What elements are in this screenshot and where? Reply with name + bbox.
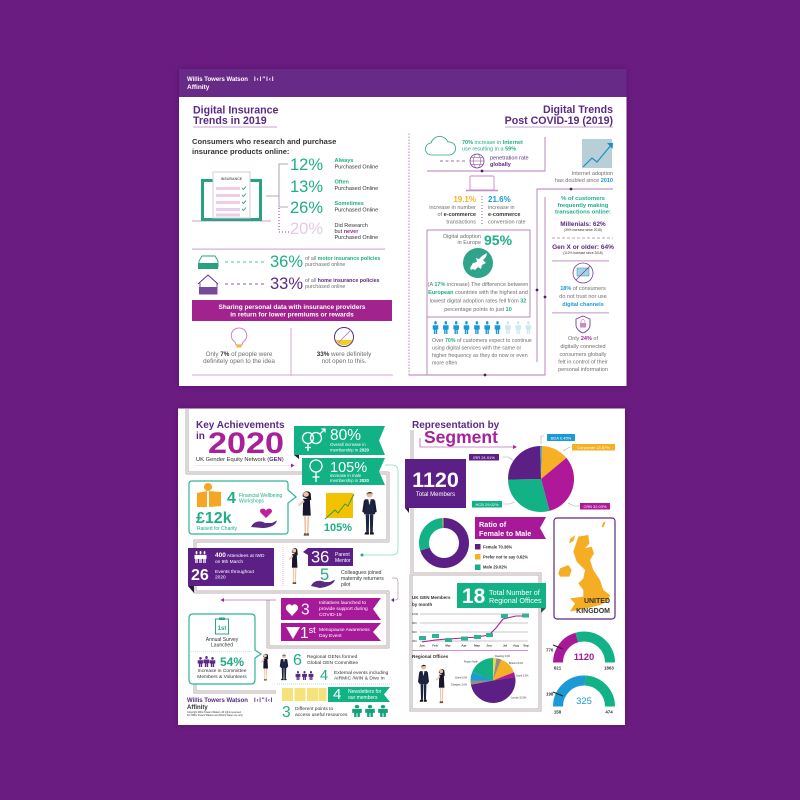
- header band: Willis Towers Watson: [187, 77, 248, 83]
- gauge: 1120 members: 1863: [604, 666, 614, 670]
- figure: man raising arm: [418, 665, 429, 702]
- callout: annual survey: [189, 614, 261, 684]
- legend: ratio: Prefer not to say 0.62%: [483, 554, 528, 560]
- stat: often 13%: [290, 178, 378, 196]
- stat: 3 different points: access useful resources: [295, 712, 348, 718]
- stat: sometimes 26%: Purchased Online: [334, 208, 378, 214]
- text: penetration rate: [490, 156, 529, 168]
- text: percentage of customers: transactions online:: [555, 210, 611, 216]
- banner: sharing personal data: [192, 300, 392, 321]
- line chart: members by month: Sep: [523, 644, 529, 648]
- stat: motor insurance 36%: [225, 253, 380, 271]
- text: 70% increase in internet: 70% increase in Internet: [462, 140, 523, 146]
- text: 18% of consumers: 18% of consumers: [560, 286, 606, 292]
- stat: sometimes 26%: [290, 199, 378, 217]
- ribbon: 105% membership: membership in 2020: [330, 478, 370, 483]
- stat: 19.1% e-commerce transactions: of e-commerce: [437, 212, 476, 218]
- pie labels: [469, 434, 615, 510]
- text: penetration rate: globally: [490, 162, 512, 168]
- stat: always 12%: 12%: [290, 156, 323, 174]
- text: 7% open to the idea: [203, 351, 275, 365]
- panel: digital adoption in europe: lowest digital adoption rates fell from 32: [430, 298, 526, 304]
- stat: often 13%: Purchased Online: [334, 186, 378, 192]
- panel: digital trends 2019: [179, 69, 626, 386]
- panel: attendees and events: on 9th March: [215, 559, 243, 565]
- stat: sometimes 26%: 26%: [290, 199, 323, 217]
- stat: 6 regional gens: 6: [293, 652, 302, 669]
- ribbon: newsletters: Newsletters for: [348, 689, 382, 695]
- logo: willis towers watson affinity: Copyright Willis Towers Watson. All rights reserved.: [187, 711, 242, 714]
- stat: motor insurance 36%: purchased online: [305, 262, 345, 268]
- text: 24% of consumers: felt in control of their: [558, 360, 608, 366]
- legend: ratio: Male 29.02%: [483, 564, 507, 570]
- panel: attendees and events: Events throughout: [215, 569, 255, 575]
- stat: 21.6% e-commerce conversion: [488, 195, 526, 226]
- stat: 5 colleagues maternity: [311, 566, 384, 588]
- callout: annual survey: Members & Volunteers: [197, 674, 247, 680]
- label: 36 parent mentor: Parent: [335, 552, 350, 558]
- connector: grey route lines: [187, 409, 540, 710]
- stat: 5 colleagues maternity: maternity returners: [341, 576, 384, 582]
- pie labels: Corporate 13.57%: [577, 445, 610, 450]
- line chart: members by month: Aug: [513, 644, 519, 648]
- callout: annual survey: 54%: [220, 655, 244, 669]
- icon: crossed out coin: [334, 328, 354, 346]
- pie chart: regional offices: [412, 654, 529, 700]
- text: percentage of customers: % of customers: [561, 196, 606, 202]
- stat: 3 different points: 3: [282, 704, 291, 721]
- line chart: members by month: 400: [412, 639, 417, 643]
- gauge: 1120 members: 1120: [574, 652, 594, 663]
- ribbon: newsletters: 4: [333, 686, 341, 703]
- icon: committee people: [198, 656, 215, 667]
- text: 18% of consumers: [559, 286, 607, 308]
- panel: digital adoption in europe: [427, 230, 530, 317]
- stat: 19.1% e-commerce transactions: transactions: [446, 220, 476, 226]
- ribbon: 80% membership: 80%: [330, 427, 361, 444]
- ribbon: menopause awareness: 1: [300, 625, 309, 642]
- gauge: 325: 198: [546, 692, 554, 696]
- stat: motor insurance 36%: 36%: [270, 253, 303, 271]
- icon: crossed laptop: [573, 263, 593, 283]
- ribbon: 105% membership: increase in male: [330, 473, 362, 478]
- text: over 70% of customers: higher frequency as they do now or even: [432, 353, 528, 359]
- icon: car: [198, 256, 218, 269]
- heading: representation by segment: Representation by: [412, 420, 500, 431]
- heading: digital insurance trends: [193, 104, 278, 128]
- stat: 5 colleagues maternity: pilot: [341, 582, 351, 588]
- bracket connector: [266, 164, 290, 232]
- stat: always 12%: Purchased Online: [334, 164, 378, 170]
- line chart: members by month: Jan: [419, 644, 425, 648]
- gauge: 1120 members: 776: [546, 648, 554, 652]
- text: over 70% of customers: Over 70% of customers expect to continue: [432, 338, 532, 344]
- label: 36 parent mentor: 36: [311, 548, 329, 566]
- callout: annual survey: Annual Survey: [206, 637, 239, 643]
- pie chart: regional offices: Regional Offices: [412, 654, 449, 659]
- icon: rising chart: [582, 139, 613, 168]
- text: 7% open to the idea: Only 7% of people were: [206, 351, 273, 358]
- banner: sharing personal data: in return for lower premiums or rewards: [230, 312, 354, 318]
- heading: key achievements in 2020: UK Gender Equity Network (GEN): [196, 457, 284, 463]
- logo: willis towers watson affinity: Affinity: [187, 705, 208, 711]
- stat: always 12%: Always: [334, 158, 353, 164]
- donut chart: female to male: [424, 523, 464, 563]
- figure: woman mentor: [289, 548, 298, 584]
- line chart: members by month: Apr: [461, 644, 467, 648]
- ribbon: initiatives covid: provide support during: [319, 606, 368, 612]
- text: percentage of customers: frequently making: [558, 203, 609, 209]
- heading: digital insurance trends: Trends in 2019: [193, 115, 267, 127]
- ribbon: ratio of female to male: Ratio of: [479, 520, 507, 529]
- label: 18 regional offices: [457, 583, 546, 613]
- gauge: 325: 158: [554, 710, 562, 714]
- pie chart: regional offices: Bristol 13.0%: [509, 662, 524, 665]
- logo: willis towers watson affinity: For Willis Towers Watson and Affinity Water use only.: [187, 714, 243, 717]
- panel: united kingdom map: UNITED: [584, 598, 610, 605]
- ribbon: 80% membership: membership in 2020: [330, 448, 370, 452]
- callout: financial wellbeing: [189, 481, 296, 534]
- callout: financial wellbeing: Raised for Charity: [197, 526, 238, 532]
- gauge: 325: [546, 680, 613, 714]
- legend: ratio: Female 70.36%: [483, 544, 512, 550]
- icon: europe map: [463, 248, 493, 278]
- panel: attendees and events: [188, 548, 274, 593]
- pie chart: regional offices: Region North: [464, 660, 479, 664]
- arrow: magenta to pie: [420, 438, 517, 449]
- stat: 5 colleagues maternity: Colleagues joined: [341, 570, 382, 576]
- logo: willis towers watson affinity: I‹I"I‹I: [254, 698, 273, 704]
- stat: home insurance 33%: [225, 275, 380, 293]
- stat: 6 regional gens: Regional GENs formed: [307, 654, 358, 660]
- heading: representation by segment: [412, 420, 500, 447]
- logo: willis towers watson affinity: Willis Towers Watson: [187, 698, 248, 704]
- panel: digital adoption in europe: in Europe: [457, 240, 481, 246]
- label: 18 regional offices: Regional Offices: [489, 596, 542, 605]
- icon: gender symbols: [302, 429, 325, 451]
- callout: financial wellbeing: £12k: [196, 510, 232, 527]
- ribbon: initiatives covid: COVID-19: [319, 612, 342, 618]
- stat: often 13%: 13%: [290, 178, 323, 196]
- panel: attendees and events: 2020: [215, 574, 226, 580]
- stat: never 20%: but never: [334, 229, 359, 235]
- stat: 6 regional gens: Global GEN Committee: [307, 660, 358, 666]
- stat: 4 external events: External events including: [334, 670, 389, 676]
- line chart: members by month: Jun: [486, 644, 492, 648]
- text: penetration rate: penetration rate: [490, 156, 529, 162]
- pie chart: segments: [524, 462, 558, 496]
- callout: financial wellbeing: Workshops: [239, 498, 264, 504]
- stat: 6 regional gens: [293, 652, 358, 669]
- ribbon: 80% membership: Overall increase in: [330, 442, 366, 447]
- stat: 21.6% e-commerce conversion: 21.6%: [488, 195, 511, 204]
- stat: 19.1% e-commerce transactions: [429, 195, 476, 226]
- heading: digital trends post covid: Post COVID-19 (2019): [505, 115, 613, 127]
- stat: millenials 62%: Millenials: 62%: [560, 221, 606, 228]
- ribbon: initiatives covid: 3: [301, 602, 310, 618]
- text: 24% of consumers: consumers globally: [559, 352, 607, 358]
- icon: clipboard: 1st: [218, 626, 226, 632]
- line chart: members by month: Jul: [503, 644, 507, 648]
- arrow: teal connector: [360, 465, 398, 556]
- panel: digital adoption in europe: European countries with the highest and: [428, 290, 528, 296]
- line chart: members by month: UK GEN Members: [412, 595, 451, 600]
- panel: digital adoption in europe: (A 17% increase) The difference between: [428, 282, 528, 288]
- stat: millenials 62%: [560, 221, 606, 232]
- stat: 4 external events: 4: [320, 668, 328, 684]
- line chart: members by month: by month: [412, 602, 432, 607]
- figure: woman small: [261, 654, 268, 681]
- gauge: 325: 325: [576, 696, 592, 707]
- stat: 4 external events: AIRMIC /WIN & Dive In: [334, 676, 385, 682]
- icon: cloud: [425, 136, 456, 155]
- stat: always 12%: [290, 156, 378, 174]
- heading: representation by segment: Segment: [424, 427, 498, 447]
- line chart: members by month: 1000: [412, 612, 419, 616]
- gauge: 1120 members: [546, 636, 614, 670]
- ribbon: initiatives covid: Initiatives launched to: [319, 600, 366, 606]
- subheading: consumers: Consumers who research and purchase: [192, 137, 336, 146]
- map: uk: [558, 522, 610, 612]
- stat: 21.6% e-commerce conversion: e-commerce: [488, 212, 520, 218]
- figure: woman presenting: [298, 491, 311, 536]
- stat: 4 external events: [296, 668, 389, 684]
- label: 36 parent mentor: [303, 548, 353, 566]
- heading: key achievements in 2020: [196, 420, 294, 468]
- callout: annual survey: Launched: [211, 642, 233, 648]
- icon: insurance document on laptop: INSURANCE: [221, 177, 243, 181]
- text: 7% open to the idea: definitely open to the idea: [203, 358, 275, 365]
- text: 70% increase in internet: [462, 140, 523, 152]
- stat: 19.1% e-commerce transactions: 19.1%: [453, 195, 476, 204]
- panel: attendees and events: 400 Attendees at IWD: [215, 552, 265, 559]
- line chart: members by month: [412, 595, 529, 651]
- panel: united kingdom map: KINGDOM: [576, 608, 610, 615]
- stat: never 20%: 20%: [290, 220, 323, 238]
- text: 24% of consumers: personal information: [558, 367, 608, 373]
- line chart: members by month: Feb: [432, 644, 438, 648]
- text: 24% of consumers: Only 24% of: [568, 336, 598, 342]
- text: 18% of consumers: digital channels: [562, 302, 604, 308]
- text: internet adoption doubled: has doubled since 2010: [555, 178, 613, 184]
- icon: laptop: [466, 176, 498, 190]
- ribbon: newsletters: [328, 686, 390, 703]
- connector frames: [409, 132, 613, 376]
- icon: house: [198, 275, 218, 294]
- subheading: consumers: insurance products online:: [192, 147, 289, 156]
- heading: digital trends post covid: Digital Trends: [543, 104, 613, 116]
- text: over 70% of customers: [432, 338, 532, 366]
- header band: I‹I"I‹I: [254, 77, 275, 83]
- banner: sharing personal data: Sharing personal data with insurance providers: [218, 304, 366, 311]
- icon: hand with heart: [251, 509, 277, 528]
- panel: attendees and events: 26: [191, 567, 209, 584]
- ribbon: 80% membership: [294, 426, 385, 459]
- text: 24% of consumers: [558, 336, 608, 373]
- stat: gen x 64%: [552, 244, 614, 255]
- ribbon: menopause awareness: [281, 623, 381, 642]
- stat: sometimes 26%: Sometimes: [334, 201, 364, 207]
- stat: 19.1% e-commerce transactions: increase in number: [429, 205, 476, 211]
- panel: united kingdom map: [554, 518, 615, 619]
- pie chart: regional offices: South 3.0%: [516, 674, 529, 678]
- callout: financial wellbeing: 4: [227, 490, 236, 507]
- pie labels: CRB 32.03%: [583, 504, 607, 509]
- gauge: 325: 474: [605, 710, 613, 714]
- arrow: grey curve: [391, 578, 398, 602]
- stat: 105%: 105%: [324, 522, 352, 534]
- pie chart: regional offices: Glasgow, 3.0%: [451, 684, 468, 686]
- text: percentage of customers: [555, 196, 611, 216]
- ribbon: 105% membership: 105%: [330, 460, 367, 476]
- ribbon: ratio of female to male: [475, 517, 546, 539]
- heading: digital trends post covid: [505, 104, 613, 128]
- pie chart: regional offices: Cities 5.0%: [455, 676, 468, 680]
- panel: 1120 total members: [405, 459, 466, 513]
- text: 33% not open: not open to this.: [322, 358, 367, 365]
- ribbon: 105% membership: [302, 458, 385, 485]
- stat: home insurance 33%: purchased online: [305, 284, 345, 290]
- panel: key achievements and representation: [178, 408, 625, 725]
- text: 24% of consumers: digitally connected: [560, 344, 606, 350]
- ribbon: menopause awareness: st: [309, 625, 316, 635]
- figure: man on phone: [362, 492, 377, 534]
- text: 70% increase in internet: use resulting in a 59%: [462, 146, 516, 152]
- pie chart: regional offices: London 50.0%: [511, 696, 527, 700]
- icons: yellow notes: [282, 688, 326, 701]
- stat: never 20%: Did Research: [334, 223, 368, 229]
- ribbon: menopause awareness: Day Event: [319, 633, 342, 639]
- panel: digital adoption in europe: percentage points to just 10: [444, 307, 512, 313]
- panel: digital adoption in europe: Digital adoption: [443, 234, 481, 240]
- stat: 5 colleagues maternity: 5: [320, 566, 329, 584]
- stat: 3 different points: Different points to: [295, 706, 334, 712]
- text: 18% of consumers: do not trust nor use: [559, 294, 607, 300]
- stat: gen x 64%: (112% increase since 2018): [563, 251, 603, 255]
- panel: 1120 total members: Total Members: [416, 492, 455, 498]
- stat: often 13%: Often: [334, 180, 350, 186]
- stat: gen x 64%: Gen X or older: 64%: [552, 244, 614, 251]
- stat: 21.6% e-commerce conversion: increase in: [488, 205, 515, 211]
- icon: female symbol: [310, 460, 322, 482]
- stat: never 20%: [290, 220, 378, 241]
- callout: financial wellbeing: Financial Wellbeing: [239, 493, 282, 499]
- label: 36 parent mentor: Mentor: [335, 558, 351, 564]
- icon row: people 70%: [433, 321, 531, 334]
- pie labels: BDA 0.45%: [551, 436, 572, 440]
- ribbon: ratio of female to male: Female to Male: [479, 529, 531, 538]
- text: over 70% of customers: more often: [432, 360, 457, 366]
- subheading: consumers: [192, 137, 336, 156]
- ribbon: newsletters: our members: [348, 695, 378, 701]
- arrow: purple left: [220, 598, 276, 602]
- heading: key achievements in 2020: in: [196, 431, 205, 442]
- figure: man small: [280, 655, 288, 680]
- pie labels: IRR 24.91%: [473, 455, 495, 460]
- text: 33% not open: [317, 351, 372, 365]
- figure: woman presenting small: [436, 669, 445, 703]
- line chart: members by month: 600: [412, 630, 417, 634]
- icon: attendees: [194, 551, 206, 563]
- text: 33% not open: 33% were definitely: [317, 351, 372, 358]
- text: internet adoption doubled: Internet adoption: [572, 171, 613, 177]
- legend: ratio: [475, 544, 528, 570]
- heading: key achievements in 2020: Key Achievements: [196, 420, 285, 431]
- stat: home insurance 33%: of all home insurance policies: [305, 278, 380, 284]
- heading: digital insurance trends: Digital Insurance: [193, 104, 278, 116]
- pie chart: regional offices: Reading 3.0%: [495, 655, 511, 658]
- chart icon: growth arrow: [325, 493, 354, 519]
- label: 18 regional offices: 18: [462, 585, 486, 608]
- line chart: members by month: Mar: [445, 644, 451, 648]
- text: over 70% of customers: using digital services with the same or: [432, 346, 521, 352]
- line chart: members by month: 800: [412, 621, 417, 625]
- panel: digital adoption in europe: 95%: [484, 232, 513, 248]
- heading: key achievements in 2020: 2020: [208, 427, 284, 460]
- header band: Affinity: [187, 84, 210, 91]
- label: 18 regional offices: Total Number of: [489, 588, 540, 597]
- gauge: 1120 members: 621: [554, 666, 562, 670]
- stat: home insurance 33%: 33%: [270, 275, 303, 293]
- text: internet adoption doubled: [555, 171, 613, 184]
- header band: [179, 69, 626, 97]
- ribbon: menopause awareness: Menopause Awareness: [319, 627, 370, 633]
- stat: never 20%: Purchased Online: [334, 235, 378, 241]
- line chart: members by month: May: [474, 644, 480, 648]
- icon: shield lock: [576, 316, 590, 333]
- stat: millenials 62%: (39% increase since 2018): [564, 228, 602, 232]
- icon: money bags: [197, 483, 221, 507]
- panel: 1120 total members: 1120: [412, 468, 459, 492]
- icon: globe: [440, 154, 484, 168]
- ribbon: initiatives covid: [281, 598, 381, 620]
- stat: 3 different points: [282, 704, 348, 721]
- icon: insurance document on laptop: [192, 172, 271, 222]
- pie labels: HCB 29.02%: [475, 502, 499, 507]
- callout: annual survey: Increase in Committee: [198, 668, 247, 674]
- stat: 21.6% e-commerce conversion: conversion rate: [488, 220, 526, 226]
- logo: willis towers watson affinity: [187, 698, 273, 717]
- stat: motor insurance 36%: of all motor insurance policies: [305, 256, 380, 262]
- icon: light bulb: [231, 328, 247, 348]
- icons: green people: [352, 705, 388, 717]
